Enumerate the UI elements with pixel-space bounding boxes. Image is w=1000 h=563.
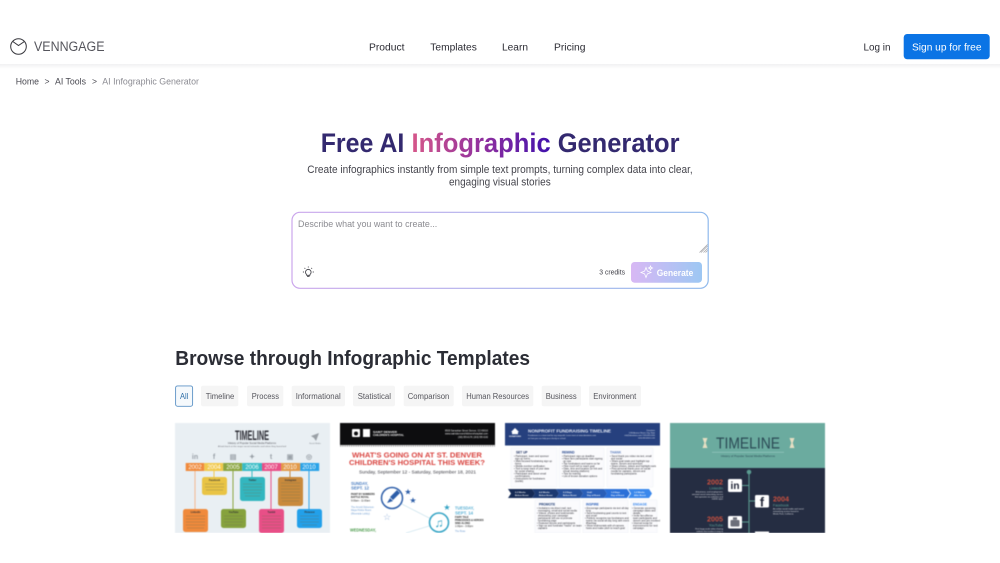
brand name: VENNGAGE <box>34 39 104 54</box>
template thumbnail: social media timeline: 2005 <box>226 465 240 471</box>
template thumbnail: dark teal timeline <box>669 422 826 533</box>
template thumbnail: social media timeline: Tumblr <box>268 511 276 514</box>
template thumbnail: nonprofit fundraising timeline: info@donations.com / 555-555-5555 <box>624 434 655 437</box>
title: Free AI <box>321 128 404 158</box>
template thumbnail: children's hospital schedule: BATTLE ROYAL <box>351 496 370 499</box>
template thumbnail: dark teal timeline: 2005 <box>707 514 723 523</box>
template thumbnail: children's hospital schedule: CHILDREN'S HOSPITAL <box>373 433 404 437</box>
chip: Timeline: Timeline <box>206 391 234 401</box>
template thumbnail: nonprofit fundraising timeline: • Invite fan-offense <box>632 514 653 518</box>
chip: Environment <box>589 386 641 406</box>
template thumbnail: nonprofit fundraising timeline: Day of Event <box>587 494 601 497</box>
template thumbnail: dark teal timeline: that operates via websites and <box>695 495 724 498</box>
button: Sign up for free: Sign up for free <box>912 42 982 54</box>
template thumbnail: dark teal timeline: in <box>731 481 739 492</box>
template thumbnail: nonprofit fundraising timeline: • Send thank you video via text, email <box>610 455 652 458</box>
title <box>321 128 680 158</box>
template thumbnail: nonprofit fundraising timeline: details <box>633 512 641 515</box>
template thumbnail: nonprofit fundraising timeline: • Share photos, videos and highlight reels <box>610 465 657 468</box>
prompt box <box>292 212 708 288</box>
chip: Informational <box>292 386 345 406</box>
template thumbnail: nonprofit fundraising timeline: THANK <box>610 450 622 454</box>
icon: light bulb <box>303 267 314 277</box>
chip: Environment: Environment <box>593 391 637 401</box>
category filter chips <box>176 386 641 406</box>
template thumbnail: dark teal timeline: Facebook <box>773 503 789 507</box>
template thumbnail: children's hospital schedule: The Arnold Dickerson <box>351 506 375 509</box>
template thumbnail: nonprofit fundraising timeline: • Share goal totals and highlight top <box>610 460 650 463</box>
template thumbnail: nonprofit fundraising timeline: #hashtag <box>586 522 597 525</box>
template thumbnail: children's hospital schedule: SUNDAY, <box>351 481 368 486</box>
template thumbnail: nonprofit fundraising timeline: Before Event <box>515 494 529 497</box>
template thumbnail: nonprofit fundraising timeline: Before Event <box>539 494 553 497</box>
template thumbnail: dark teal timeline: 2004 <box>773 494 789 503</box>
template thumbnail: nonprofit fundraising timeline: • Generate upcoming <box>632 507 656 510</box>
template thumbnail: social media timeline: Instagram <box>285 479 296 482</box>
template thumbnail: social media timeline <box>175 423 330 533</box>
template thumbnail: nonprofit fundraising timeline: Before Event <box>563 494 577 497</box>
chip: Timeline <box>201 386 238 406</box>
template thumbnail: nonprofit fundraising timeline: captains <box>538 527 548 530</box>
template thumbnail: nonprofit fundraising timeline: • Show testimonials with of-camera <box>585 524 624 528</box>
template thumbnail: nonprofit fundraising timeline: • Internal recap for <box>632 522 653 525</box>
nav link: Log in: Log in <box>864 42 890 54</box>
placeholder text: Describe what you want to create... <box>298 219 437 230</box>
template thumbnail: social media timeline: LinkedIn <box>191 511 201 514</box>
nav link: Pricing: Pricing <box>554 42 586 53</box>
template thumbnail: children's hospital schedule: CHILDREN'S HOSPITAL THIS WEEK? <box>349 458 485 467</box>
template thumbnail: nonprofit fundraising timeline: and email <box>586 514 597 518</box>
template thumbnail: nonprofit fundraising timeline: • List of known donation options <box>562 475 598 478</box>
template thumbnail: dark teal timeline: YouTube <box>709 523 723 527</box>
template thumbnail: nonprofit fundraising timeline: donors and join involved <box>633 520 661 522</box>
template thumbnail: social media timeline: TIMELINE <box>235 428 269 443</box>
subtitle: Create infographics instantly from simple text prompts, turning complex data into clear, <box>307 164 693 176</box>
template thumbnail: children's hospital schedule: www.saintdenverchildrenshospital.com <box>445 433 488 436</box>
template thumbnail: nonprofit fundraising timeline: • Send fundraising goal counts to text <box>585 512 627 515</box>
template thumbnail: nonprofit fundraising timeline: PROMOTE <box>539 502 555 506</box>
template thumbnail: dark teal timeline: History of Popular Social Media Platforms <box>721 454 776 458</box>
template thumbnail: nonprofit fundraising timeline: 4-6 Weeks <box>539 491 550 494</box>
template thumbnail: children's hospital schedule: PAINT BY NUMBERS <box>351 493 375 496</box>
template thumbnail: nonprofit fundraising timeline: REMIND <box>562 450 575 454</box>
template thumbnail: social media timeline: in <box>192 454 198 461</box>
credits label: 3 credits <box>599 268 625 277</box>
template thumbnail: nonprofit fundraising timeline: • Participant and donor email <box>514 472 546 476</box>
template thumbnail: dark teal timeline: mobile apps <box>712 499 723 501</box>
template thumbnail: children's hospital schedule: WEDNESDAY, <box>350 528 376 533</box>
template thumbnail: social media timeline: Twitter <box>249 479 256 482</box>
template thumbnail: nonprofit fundraising timeline: • Tips for training <box>562 472 581 476</box>
nav link: Learn: Learn <box>502 42 528 53</box>
template thumbnail: social media timeline: 2002 <box>188 465 202 471</box>
template thumbnail: nonprofit fundraising timeline: • Tool to keep track of your data <box>514 468 550 470</box>
template thumbnail: social media timeline: History of Popular Social Media Platforms <box>228 441 277 445</box>
template thumbnail: nonprofit fundraising timeline: • Web-focused fundraising sign up <box>514 460 553 463</box>
chip: Business: Business <box>546 391 577 401</box>
template thumbnail: children's hospital schedule: FAIRY TALE <box>455 516 469 519</box>
template thumbnail: social media timeline: Facebook <box>209 479 221 482</box>
template thumbnail: nonprofit fundraising timeline: showcasing your campaign <box>538 514 569 518</box>
template thumbnail: nonprofit fundraising timeline: teams, donors and sponsors <box>611 462 643 466</box>
template thumbnail: nonprofit fundraising timeline: 1-2 Days <box>611 492 621 494</box>
template thumbnail: dark teal timeline: 2002 <box>707 477 723 486</box>
template thumbnail: social media timeline: ◎ <box>306 454 312 461</box>
template thumbnail: nonprofit fundraising timeline: 2-3 Weeks <box>515 492 526 494</box>
template thumbnail: social media timeline: Pinterest <box>304 511 315 514</box>
template thumbnail: nonprofit fundraising timeline: 1234 Avenue Street, City, State <box>629 432 655 434</box>
template thumbnail: nonprofit fundraising timeline: campaign <box>633 527 644 530</box>
template thumbnail: nonprofit fundraising timeline: • Date, time and location (or link and <box>562 468 603 470</box>
template thumbnail: nonprofit fundraising timeline: Until <box>587 491 592 494</box>
template thumbnail: nonprofit fundraising timeline: • Invitations via direct mail, text <box>537 507 572 510</box>
title: Generator <box>558 128 680 158</box>
template thumbnail: nonprofit fundraising timeline: • How much left to reach goal <box>562 465 595 468</box>
subtitle: engaging visual stories <box>449 177 551 189</box>
template thumbnail: nonprofit fundraising timeline: DONATIONS <box>509 435 522 438</box>
template thumbnail: nonprofit fundraising timeline: • Participant, team and sponsor <box>514 455 549 458</box>
template thumbnail: children's hospital schedule: ★ <box>404 488 412 496</box>
template thumbnail: nonprofit fundraising timeline: • Encourage participants via text all day <box>585 507 629 510</box>
template thumbnail: nonprofit fundraising timeline: www.donations.com <box>638 436 655 440</box>
template thumbnail: dark teal timeline: An online social media and social <box>773 508 804 510</box>
template thumbnail: dark teal timeline: website that makes it easy to <box>696 530 724 533</box>
template thumbnail: children's hospital schedule: ☆ <box>383 512 391 522</box>
chip: All <box>176 386 193 406</box>
chip: Statistical <box>353 386 395 406</box>
nav link: Product: Product <box>369 42 405 53</box>
template thumbnail: children's hospital schedule: (Riverside Lobby) <box>351 512 370 516</box>
template thumbnail: children's hospital schedule: ★ <box>443 503 451 512</box>
template thumbnail: nonprofit fundraising timeline: NONPROFIT FUNDRAISING TIMELINE <box>528 428 612 434</box>
template thumbnail: nonprofit fundraising timeline: • Post personal thank-yous on social <box>610 468 651 470</box>
template thumbnail: social media timeline: 2010 <box>302 465 316 471</box>
chip: Statistical: Statistical <box>358 391 391 401</box>
resize handle <box>700 244 708 252</box>
template thumbnail: children's hospital schedule: The Rose <box>455 530 466 533</box>
template thumbnail: dark teal timeline: oriented social networking service <box>692 493 724 496</box>
breadcrumbs: Home <box>16 76 39 86</box>
template thumbnail: children's hospital schedule: TUESDAY, <box>455 505 474 510</box>
template thumbnail: nonprofit fundraising timeline: After Event <box>634 494 646 497</box>
template thumbnail: children's hospital schedule <box>339 422 496 533</box>
template thumbnail: children's hospital schedule: ♫ <box>434 516 444 530</box>
template thumbnail: dark teal timeline: Menlo Park, California <box>773 512 794 516</box>
template thumbnail: social media timeline: ✦ <box>249 453 255 461</box>
template thumbnail: nonprofit fundraising timeline: team participants and <box>633 517 658 520</box>
template thumbnail: dark teal timeline: f <box>760 495 765 509</box>
template thumbnail: social media timeline: 2006 <box>245 465 259 471</box>
template thumbnail: nonprofit fundraising timeline: • Mobile-number verification <box>514 465 545 468</box>
template thumbnail: nonprofit fundraising timeline: messaging, email and social media <box>538 510 578 512</box>
template thumbnail: nonprofit fundraising timeline: and social <box>611 458 623 460</box>
template thumbnail: children's hospital schedule: 9:00am - 11:00am <box>351 500 370 502</box>
template thumbnail: social media timeline: 2004 <box>207 465 221 471</box>
template thumbnail: social media timeline: 2007 <box>264 465 278 471</box>
template thumbnail: nonprofit fundraising timeline: fundraising participants <box>611 472 637 476</box>
button: Generate: Generate <box>657 268 693 279</box>
template thumbnail: nonprofit fundraising timeline: • Have fans participants start signing <box>562 458 603 460</box>
template thumbnail: nonprofit fundraising timeline: Donations <box>646 429 655 432</box>
template thumbnail: nonprofit fundraising timeline: • Top fundraisers and teams so far <box>562 462 600 466</box>
template thumbnail: children's hospital schedule: WHAT'S GOING ON AT ST. DENVER <box>352 450 482 459</box>
template thumbnail: children's hospital schedule: SEPT. 12 <box>351 486 370 491</box>
template thumbnail: nonprofit fundraising timeline: for social sharing <box>515 470 535 473</box>
chip: Business <box>542 386 581 406</box>
template thumbnail: social media timeline: f <box>213 454 216 461</box>
icon: sparkle <box>641 266 652 278</box>
template thumbnail: children's hospital schedule: Maya Hinkle Room <box>351 509 371 512</box>
template thumbnail: children's hospital schedule: SAINT DENVER <box>373 430 397 434</box>
chip: Process: Process <box>252 391 279 401</box>
template thumbnail: social media timeline: Social Media <box>309 443 322 445</box>
template thumbnail: nonprofit fundraising timeline: campaign dates and <box>633 510 656 512</box>
template thumbnail: social media timeline: 2010 <box>283 465 297 471</box>
chip: Informational: Informational <box>296 391 341 401</box>
section heading: Browse through Infographic Templates <box>175 348 530 370</box>
template thumbnail: nonprofit fundraising timeline: media for captains, donors and <box>611 470 646 473</box>
template thumbnail: nonprofit fundraising timeline <box>504 422 661 530</box>
template thumbnail: dark teal timeline: A business- and employment- <box>696 490 723 494</box>
chip: Comparison: Comparison <box>408 391 449 401</box>
template thumbnail: children's hospital schedule: Sunday, September 12 - Saturday, September 18, 2021 <box>359 470 477 474</box>
template thumbnail: children's hospital schedule: 1:00pm - 3:00pm <box>455 525 473 528</box>
template thumbnail: nonprofit fundraising timeline: sign up forms <box>515 458 531 460</box>
template thumbnail: nonprofit fundraising timeline: forms <box>515 462 522 466</box>
breadcrumbs: > <box>92 76 97 86</box>
breadcrumbs: AI Infographic Generator <box>102 76 199 86</box>
chip: Process <box>247 386 283 406</box>
template thumbnail: nonprofit fundraising timeline: Fundraisers is a team tool for any nonprofit. Learn more at www.donations.com <box>528 434 596 437</box>
nav link: Templates: Templates <box>430 42 477 53</box>
template thumbnail: nonprofit fundraising timeline: on how you can help your charity or school. <box>528 437 566 440</box>
button: Generate <box>631 262 702 283</box>
template thumbnail: dark teal timeline: LinkedIn <box>709 486 723 490</box>
template thumbnail: nonprofit fundraising timeline: long <box>586 510 591 512</box>
template thumbnail: social media timeline: A look back at the major social networks and when they launched <box>218 445 286 448</box>
template thumbnail: nonprofit fundraising timeline: • Instructions for fundraisers <box>514 478 546 480</box>
template thumbnail: children's hospital schedule: ★ <box>409 496 417 505</box>
chip: All: All <box>180 391 188 401</box>
template thumbnail: children's hospital schedule: SEPT. 14 <box>455 510 474 515</box>
template thumbnail: social media timeline: t <box>270 454 273 461</box>
template thumbnail: nonprofit fundraising timeline: (toolkit) <box>515 480 523 483</box>
template thumbnail: dark teal timeline: TIMELINE <box>716 436 780 452</box>
template thumbnail: nonprofit fundraising timeline: confirmations <box>515 475 531 478</box>
template thumbnail: children's hospital schedule: SING ALONG <box>455 522 470 525</box>
template thumbnail: nonprofit fundraising timeline: • Participant sign-up deadline <box>562 455 595 458</box>
template thumbnail: nonprofit fundraising timeline: hosts and make pitch to reach goal <box>586 527 625 530</box>
template thumbnail: nonprofit fundraising timeline: virtual viewing platform) <box>563 470 589 473</box>
breadcrumbs: AI Tools <box>55 76 86 86</box>
template thumbnail: dark teal timeline: First large-scale video sharing <box>695 528 724 530</box>
breadcrumbs <box>16 76 199 86</box>
icon: Venngage logo <box>11 39 26 54</box>
title: Infographic <box>412 128 551 158</box>
template thumbnail: nonprofit fundraising timeline: improvements for next <box>633 524 658 528</box>
template thumbnail: nonprofit fundraising timeline: participants will use to promote <box>538 517 573 520</box>
breadcrumbs: > <box>44 76 50 86</box>
chip: Human Resources <box>462 386 533 406</box>
template thumbnail: nonprofit fundraising timeline: 1-2 Weeks <box>634 492 645 494</box>
template thumbnail: nonprofit fundraising timeline: • Publicly recognize top fundraisers and <box>585 517 629 520</box>
template thumbnail: social media timeline: ▣ <box>287 454 294 461</box>
template thumbnail: nonprofit fundraising timeline: • Videos, photos and testimonials <box>537 512 575 515</box>
template thumbnail: dark teal timeline: networking service based in <box>773 510 799 513</box>
template thumbnail: nonprofit fundraising timeline: Day of Event <box>611 494 625 497</box>
template thumbnail: nonprofit fundraising timeline: up now <box>563 460 571 463</box>
chip: Human Resources: Human Resources <box>466 391 529 401</box>
template thumbnail: children's hospital schedule: PRINCESSES & HEROES <box>455 519 484 522</box>
template thumbnail: nonprofit fundraising timeline: SET UP <box>516 450 528 454</box>
template thumbnail: nonprofit fundraising timeline: 2-3 Days <box>563 492 573 494</box>
template thumbnail: children's hospital schedule: (303) 555-0178 | (303) 555-0182 <box>458 436 489 439</box>
template thumbnail: nonprofit fundraising timeline: fundraising page <box>538 520 557 522</box>
navigation bar <box>0 0 1000 69</box>
template thumbnail: nonprofit fundraising timeline: • Featured donors and participants <box>537 522 576 525</box>
button: Sign up for free <box>904 34 990 59</box>
template thumbnail: social media timeline: ▤ <box>230 454 237 461</box>
template thumbnail: nonprofit fundraising timeline: ENGAGE <box>633 502 647 506</box>
template thumbnail: nonprofit fundraising timeline: INSPIRE <box>586 502 599 506</box>
template thumbnail: nonprofit fundraising timeline: teams via social all day long with event <box>586 520 629 522</box>
template thumbnail: social media timeline: YouTube <box>229 511 239 514</box>
template thumbnail: nonprofit fundraising timeline: • Sign-up and fundraise "hacks" on team <box>537 524 582 528</box>
chip: Comparison <box>404 386 454 406</box>
subtitle <box>307 164 693 189</box>
template thumbnail: children's hospital schedule: 8500 Samaritan Street Denver, CO 80010 <box>445 430 489 432</box>
